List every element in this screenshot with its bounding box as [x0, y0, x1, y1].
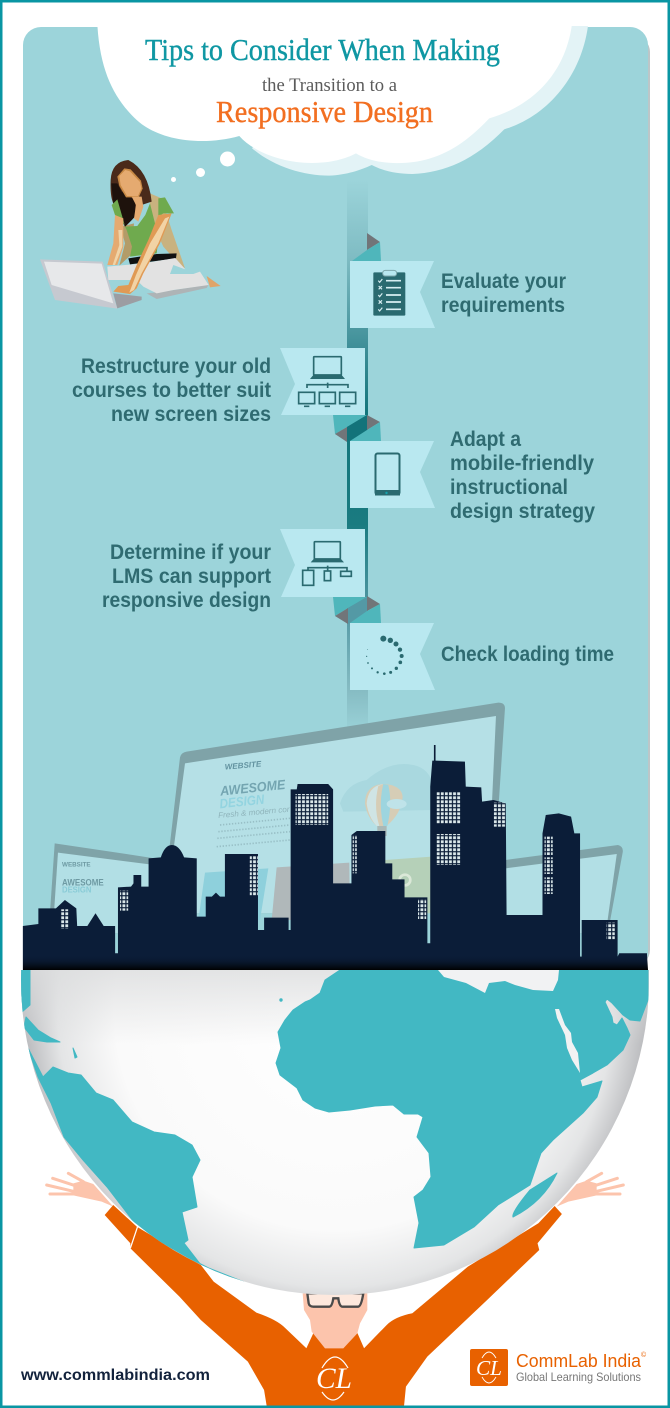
step 2 text: Restructure your old [81, 355, 271, 378]
man: right hand [557, 1173, 623, 1207]
logo: CommLab India [470, 1349, 647, 1386]
step 2 text [72, 355, 271, 426]
logo copyright: © [641, 1351, 647, 1359]
step 2 card: restructure courses [280, 348, 365, 415]
background laptops [49, 703, 623, 933]
large laptop screen: AWESOME [218, 777, 287, 799]
website url: www.commlabindia.com [20, 1367, 210, 1384]
step 1 text [441, 270, 566, 317]
chest logo: CL [316, 1362, 352, 1395]
cloud [97, 26, 588, 176]
fold 2 [333, 415, 381, 442]
step 4 text: responsive design [102, 589, 271, 612]
man: left hand [47, 1173, 113, 1207]
cloud shadow [252, 26, 588, 176]
logo mark [470, 1349, 508, 1386]
title line 1: Tips to Consider When Making [145, 32, 500, 67]
fold 1 [352, 233, 381, 261]
left laptop screen: WEBSITE [62, 860, 91, 868]
step 3 card: mobile-friendly [350, 441, 435, 508]
North-west land edge [20, 970, 30, 1012]
globe [21, 970, 649, 1295]
logo tagline: Global Learning Solutions [516, 1370, 641, 1384]
Red Sea [555, 1009, 580, 1073]
step 2 text: courses to better suit [72, 379, 271, 402]
large laptop screen: DESIGN [219, 792, 265, 811]
step 2 text: new screen sizes [111, 403, 271, 426]
balloon [365, 784, 407, 836]
icon: laptop linked to monitors [299, 357, 356, 406]
step 3 text [450, 428, 595, 523]
Mediterranean [438, 970, 559, 993]
title line 2: the Transition to a [262, 75, 398, 96]
large laptop screen: Fresh & modern cor [218, 805, 290, 820]
fold 3 [333, 596, 381, 624]
step 1 card: evaluate requirements [350, 261, 435, 328]
step 4 card: LMS support [280, 529, 365, 597]
step 4 text [102, 541, 271, 612]
man: body with raised arms [105, 1205, 562, 1408]
continents [20, 970, 648, 1284]
thought bubbles [171, 152, 235, 182]
step 5 card: loading time [350, 623, 435, 690]
South America [28, 1048, 244, 1284]
cloud body [97, 26, 572, 163]
step 3 text: design strategy [450, 500, 595, 523]
icon: tablet [375, 454, 400, 496]
globe top shading [23, 970, 649, 1022]
man: head with glasses [303, 1293, 367, 1348]
Madagascar [513, 1173, 557, 1217]
left laptop screen: AWESOME [62, 878, 104, 888]
panel: sky background [23, 27, 648, 970]
illustration: woman with laptop [40, 160, 221, 309]
Caribbean islands [24, 1017, 60, 1042]
city skyline [23, 745, 647, 971]
step 1 text: Evaluate your [441, 270, 566, 293]
skyline base shadow [23, 955, 648, 970]
large laptop screen: WEBSITE [224, 759, 262, 772]
icon: laptop linked to devices [303, 542, 351, 585]
step 4 text: LMS can support [112, 565, 271, 588]
icon: loading spinner [366, 636, 404, 675]
step 3 text: Adapt a [450, 428, 521, 451]
left laptop screen [49, 843, 155, 933]
Africa and Eurasia [276, 970, 648, 1248]
step 3 text: instructional [450, 476, 568, 499]
step 4 text: Determine if your [110, 541, 271, 564]
logo name: CommLab India [516, 1351, 642, 1371]
step 1 text: requirements [441, 294, 565, 317]
icon: clipboard checklist [373, 270, 405, 316]
panel shadow [28, 36, 650, 966]
logo mark: CL [476, 1356, 502, 1380]
left laptop screen: DESIGN [62, 885, 91, 894]
step 5 text: Check loading time [441, 643, 614, 666]
large laptop screen [160, 703, 505, 920]
timeline ribbon [347, 180, 368, 735]
right laptop screen [506, 845, 623, 933]
step 3 text: mobile-friendly [450, 452, 594, 475]
title line 3: Responsive Design [216, 94, 433, 129]
